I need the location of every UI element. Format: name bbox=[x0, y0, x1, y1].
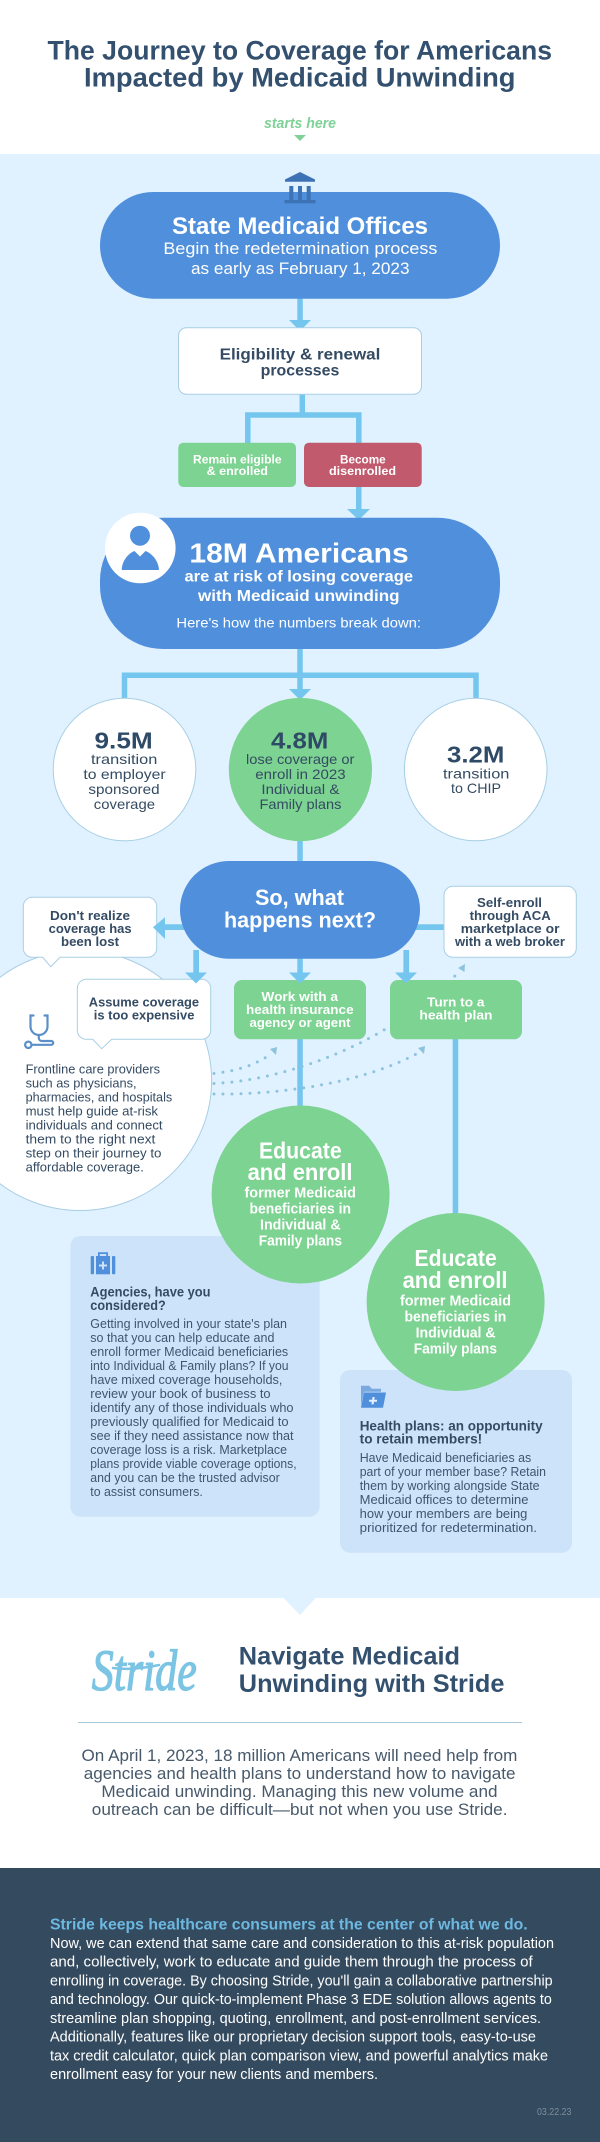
connector: eligibility to outcomes bbox=[248, 394, 359, 443]
agencies body text: enroll former Medicaid beneficiaries bbox=[90, 1345, 288, 1359]
stat circle: 4.8M: enroll in 2023 bbox=[255, 766, 346, 782]
arrow: pill to don't realize bubble bbox=[153, 917, 193, 939]
closing body text: tax credit calculator, quick plan comparison view, and powerful analytics make bbox=[50, 2047, 548, 2064]
agencies heading: Agencies, have you bbox=[90, 1285, 210, 1300]
circle: educate and enroll, agencies: former Medicaid bbox=[244, 1184, 356, 1201]
health plans heading bbox=[360, 1419, 543, 1447]
circle: educate and enroll, agencies bbox=[212, 1106, 390, 1284]
heading: navigate with Stride bbox=[239, 1643, 504, 1698]
state offices text: as early as February 1, 2023 bbox=[191, 259, 410, 278]
closing body text: and technology. Our quick-to-implement Phase 3 EDE solution allows agents to bbox=[50, 1991, 552, 2008]
frontline providers text bbox=[26, 1061, 172, 1174]
agencies body text: plans provide viable coverage options, bbox=[90, 1457, 297, 1471]
frontline providers text: pharmacies, and hospitals bbox=[26, 1089, 172, 1104]
18M subheading: are at risk of losing coverage bbox=[184, 569, 413, 586]
health plans body text: prioritized for redetermination. bbox=[360, 1521, 537, 1535]
closing body text: enrolling in coverage. By choosing Stride, you'll gain a collaborative partnership bbox=[50, 1973, 553, 1990]
callout: self-enroll: with a web broker bbox=[454, 934, 565, 949]
agencies body text: previously qualified for Medicaid to bbox=[90, 1415, 289, 1429]
stat circle: 3.2M: 3.2M bbox=[447, 742, 504, 768]
text block: April 1 summary: Medicaid unwinding. Managing this new volume and bbox=[101, 1783, 497, 1801]
arrow: pill to health plan box stem bbox=[403, 950, 409, 975]
circle: educate and enroll, agencies: and enroll bbox=[248, 1159, 352, 1185]
panel: so what happens next pill: happens next? bbox=[224, 907, 376, 932]
frontline providers text: such as physicians, bbox=[26, 1075, 137, 1090]
box: turn to a health plan: health plan bbox=[419, 1008, 493, 1023]
frontline providers text: them to the right next bbox=[26, 1131, 156, 1146]
circle: educate and enroll, agencies: Family plans bbox=[259, 1232, 342, 1249]
panel: eligibility box: Eligibility & renewal bbox=[220, 346, 380, 363]
18M heading: 18M Americans bbox=[189, 537, 409, 568]
callout: self-enroll: marketplace or bbox=[461, 921, 560, 936]
health plans body text bbox=[360, 1451, 546, 1535]
box: remain eligible: Remain eligible bbox=[193, 452, 282, 466]
arrow heads over green boxes bbox=[289, 972, 417, 984]
title: Impacted by Medicaid Unwinding bbox=[84, 63, 516, 93]
text block: April 1 summary: outreach can be difficult—but not when you use Stride. bbox=[92, 1801, 508, 1819]
circle: educate and enroll, health plans: and enroll bbox=[403, 1267, 508, 1293]
stat circle: 3.2M: transition bbox=[443, 765, 509, 781]
circle: educate and enroll, health plans bbox=[367, 1213, 545, 1391]
box: work with an agency: agency or agent bbox=[250, 1015, 351, 1030]
box: work with an agency: Work with a bbox=[261, 989, 339, 1004]
connector: 18M to breakdown circles bbox=[124, 649, 476, 700]
panel: eligibility box: processes bbox=[261, 363, 339, 380]
agencies heading: considered? bbox=[90, 1298, 166, 1313]
frontline providers text: step on their journey to bbox=[26, 1145, 161, 1160]
box: turn to a health plan bbox=[390, 980, 522, 1039]
frontline providers text: Frontline care providers bbox=[26, 1061, 160, 1076]
frontline providers text: individuals and connect bbox=[26, 1117, 163, 1132]
health plans body text: Have Medicaid beneficiaries as bbox=[360, 1451, 531, 1465]
box: turn to a health plan: Turn to a bbox=[427, 995, 485, 1010]
dotted arrows: providers to next steps bbox=[214, 964, 465, 1094]
breakdown intro: Here's how the numbers break down: bbox=[176, 615, 421, 631]
panel: 18M Americans pill bbox=[100, 513, 500, 649]
circle: educate and enroll, agencies: beneficiaries in bbox=[250, 1200, 351, 1217]
callout: don't realize coverage has been lost: coverage has bbox=[49, 921, 132, 936]
stat circle: 9.5M: sponsored bbox=[88, 781, 160, 797]
agencies heading bbox=[90, 1285, 210, 1313]
stat circle: 4.8M: lose coverage or bbox=[246, 751, 355, 767]
panel: frontline care providers circle bbox=[0, 950, 212, 1210]
frontline providers text: affordable coverage. bbox=[26, 1159, 144, 1174]
panel: journey flow background bbox=[0, 154, 600, 1598]
state offices text: Begin the redetermination process bbox=[163, 239, 437, 258]
circle: educate and enroll, health plans: former Medicaid bbox=[400, 1292, 511, 1309]
health plans body text: Medicaid offices to determine bbox=[360, 1493, 529, 1507]
stat circle: 9.5M: 9.5M bbox=[94, 727, 153, 753]
circle: educate and enroll, health plans: Educate bbox=[414, 1245, 497, 1271]
arrow: pill to agency box stem bbox=[297, 950, 303, 975]
health plans heading: to retain members! bbox=[360, 1432, 482, 1447]
closing body text bbox=[50, 1935, 554, 2083]
closing body text: Now, we can extend that same care and consideration to this at-risk population bbox=[50, 1935, 554, 1952]
agencies body text: see if they need assistance now that bbox=[90, 1429, 294, 1443]
stat circle: 9.5M: to employer bbox=[83, 766, 166, 782]
panel: Stride closing section bbox=[0, 1868, 600, 2142]
panel: state Medicaid offices pill bbox=[100, 192, 500, 299]
panel: so what happens next pill bbox=[180, 861, 420, 959]
callout: don't realize coverage has been lost: been lost bbox=[61, 934, 120, 949]
health plans body text: them by working alongside State bbox=[360, 1479, 540, 1493]
frontline providers text: must help guide at-risk bbox=[26, 1103, 159, 1118]
stat circle: 3.2M bbox=[404, 698, 547, 841]
closing body text: enrollment easy for your new clients and members. bbox=[50, 2066, 378, 2083]
agencies body text: so that you can help educate and bbox=[90, 1331, 274, 1345]
icon: medical briefcase bbox=[91, 1252, 115, 1274]
box: work with an agency: health insurance bbox=[246, 1002, 354, 1017]
callout: self-enroll bbox=[444, 886, 576, 957]
icon: government building bbox=[284, 172, 316, 203]
circle: educate and enroll, health plans: beneficiaries in bbox=[404, 1308, 506, 1325]
starts here label: starts here bbox=[264, 116, 336, 132]
18M subheading bbox=[184, 569, 413, 605]
title: The Journey to Coverage for Americans bbox=[48, 35, 552, 65]
closing heading: Stride keeps healthcare consumers at the center of what we do. bbox=[50, 1916, 528, 1934]
circle: educate and enroll, health plans: Family plans bbox=[414, 1340, 497, 1357]
heading: navigate with Stride: Unwinding with Stride bbox=[239, 1670, 504, 1698]
arrow: pill to assume coverage bubble stem bbox=[193, 950, 199, 975]
icon: medical folder bbox=[361, 1386, 386, 1408]
closing body text: and, collectively, work to educate and guide them through the process of bbox=[50, 1954, 534, 1971]
state offices text bbox=[163, 239, 437, 278]
box: become disenrolled: disenrolled bbox=[329, 464, 396, 478]
callout: self-enroll: Self-enroll bbox=[477, 895, 542, 910]
title bbox=[48, 35, 552, 93]
circle: educate and enroll, agencies: Educate bbox=[259, 1137, 342, 1163]
arrow head: to assume coverage bubble bbox=[185, 972, 207, 984]
panel: agencies card bbox=[70, 1236, 320, 1517]
callout: assume coverage is too expensive: is too expensive bbox=[94, 1008, 194, 1023]
callout: don't realize coverage has been lost bbox=[23, 897, 157, 967]
health plans heading: Health plans: an opportunity bbox=[360, 1419, 543, 1434]
connector: center circle to next pill bbox=[297, 840, 303, 864]
stat circle: 4.8M: Individual & bbox=[261, 781, 340, 797]
callout: don't realize coverage has been lost: Don't realize bbox=[50, 908, 130, 923]
health plans body text: how your members are being bbox=[360, 1507, 527, 1521]
agencies body text: into Individual & Family plans? If you bbox=[90, 1359, 289, 1373]
stat circle: 4.8M bbox=[229, 698, 372, 841]
stat circle: 9.5M: coverage bbox=[94, 796, 155, 812]
closing body text: Additionally, features like our proprietary decision support tools, easy-to-use bbox=[50, 2028, 536, 2045]
text block: April 1 summary: agencies and health plans to understand how to navigate bbox=[84, 1765, 516, 1783]
callout: assume coverage is too expensive bbox=[77, 979, 211, 1049]
icon: stethoscope bbox=[25, 1016, 53, 1048]
stat circle: 9.5M bbox=[53, 698, 196, 841]
agencies body text: to assist consumers. bbox=[90, 1485, 203, 1499]
stat circle: 9.5M: transition bbox=[91, 751, 157, 767]
connector: pill to self-enroll bubble bbox=[410, 924, 446, 930]
arrow: disenrolled to 18M bbox=[347, 487, 370, 520]
state offices heading: State Medicaid Offices bbox=[172, 213, 428, 240]
callout: assume coverage is too expensive: Assume coverage bbox=[89, 995, 199, 1010]
date stamp: 03.22.23 bbox=[537, 2107, 572, 2118]
agencies body text: coverage loss is a risk. Marketplace bbox=[90, 1443, 287, 1457]
section pointer bbox=[283, 1598, 316, 1615]
agencies body text bbox=[90, 1317, 297, 1499]
stat circle: 3.2M: to CHIP bbox=[451, 780, 501, 796]
box: become disenrolled: Become bbox=[340, 452, 386, 466]
agencies body text: identify any of those individuals who bbox=[90, 1401, 294, 1415]
callout: self-enroll: through ACA bbox=[470, 908, 551, 923]
box: become disenrolled bbox=[304, 443, 422, 487]
text block: April 1 summary bbox=[82, 1747, 517, 1819]
panel: health plans card bbox=[340, 1370, 572, 1553]
box: remain eligible: & enrolled bbox=[207, 464, 268, 478]
starts here label bbox=[264, 116, 336, 141]
panel: eligibility box bbox=[178, 328, 422, 394]
health plans body text: part of your member base? Retain bbox=[360, 1465, 546, 1479]
connector: health plan box to educate circle bbox=[453, 1039, 458, 1215]
arrow: state offices to eligibility bbox=[289, 298, 311, 331]
panel: so what happens next pill: So, what bbox=[255, 885, 344, 910]
heading: navigate with Stride: Navigate Medicaid bbox=[239, 1643, 460, 1671]
agencies body text: Getting involved in your state's plan bbox=[90, 1317, 287, 1331]
agencies body text: and you can be the trusted advisor bbox=[90, 1471, 280, 1485]
agencies body text: review your book of business to bbox=[90, 1387, 271, 1401]
closing body text: streamline plan shopping, quoting, enrollment, and post-enrollment services. bbox=[50, 2010, 541, 2027]
connector: agency box to educate circle bbox=[297, 1039, 303, 1109]
box: remain eligible bbox=[178, 443, 296, 487]
text block: April 1 summary: On April 1, 2023, 18 million Americans will need help from bbox=[82, 1747, 517, 1765]
logo: Stride: Stride bbox=[92, 1638, 197, 1703]
circle: educate and enroll, health plans: Individual & bbox=[416, 1324, 496, 1341]
agencies body text: have mixed coverage households, bbox=[90, 1373, 282, 1387]
stat circle: 4.8M: Family plans bbox=[260, 796, 341, 812]
18M subheading: with Medicaid unwinding bbox=[197, 588, 400, 605]
stat circle: 4.8M: 4.8M bbox=[271, 727, 328, 753]
box: work with an agency bbox=[234, 980, 366, 1039]
icon: person in white circle bbox=[105, 513, 176, 583]
circle: educate and enroll, agencies: Individual & bbox=[260, 1216, 341, 1233]
